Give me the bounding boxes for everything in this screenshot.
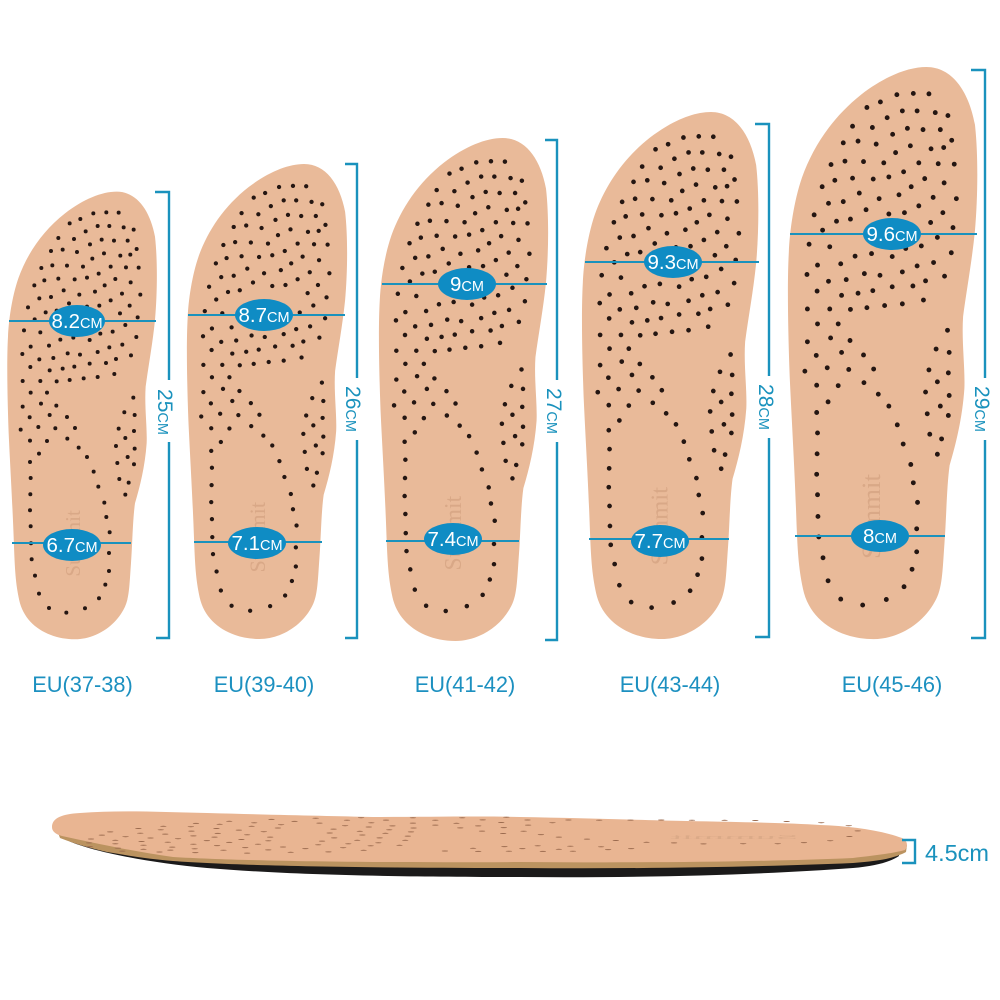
heel width line: [12, 542, 131, 544]
black base layer: [60, 830, 899, 877]
size label 37-38: EU(37-38): [32, 672, 133, 697]
insole: EU 37-38: [7, 192, 176, 639]
side view insole: [52, 811, 989, 877]
length bracket: [971, 70, 985, 638]
insole body: Summit: [441, 495, 467, 571]
ball width badge 8.7cm: [235, 299, 293, 331]
heel width line: [194, 541, 322, 543]
heel width badge 7.1cm: 7.1CM: [231, 532, 283, 555]
ball width badge 8.2cm: 8.2CM: [51, 310, 103, 333]
ball width badge 9cm: 9CM: [450, 273, 484, 296]
insole body: [187, 164, 347, 639]
ball width line: [585, 261, 759, 263]
ball width line: [790, 233, 977, 235]
ball width badge 8.7cm: 8.7CM: [238, 304, 290, 327]
size label 45-46: EU(45-46): [842, 672, 942, 697]
size label 41-42: EU(41-42): [415, 672, 515, 697]
heel width badge 8cm: [851, 520, 909, 552]
thickness label 4.5cm: 4.5cm: [925, 840, 989, 866]
insole body: [788, 67, 977, 639]
heel width badge 7.1cm: [228, 527, 286, 559]
length label 25cm: 25 CM: [153, 389, 176, 435]
length bracket: [345, 164, 357, 638]
insole body: Summit: [856, 473, 886, 559]
leather top surface: [52, 811, 907, 862]
size labels: [32, 672, 942, 697]
cork layer: [55, 825, 907, 868]
ball width line: [9, 320, 156, 322]
insole: EU 39-40: [187, 164, 364, 639]
heel width line: [386, 540, 519, 542]
heel width badge 7.7cm: 7.7CM: [634, 530, 686, 553]
length bracket: [545, 140, 557, 640]
ball width badge 9.6cm: 9.6CM: [866, 223, 918, 246]
heel width line: [795, 535, 945, 537]
insole body: Summit: [61, 510, 85, 577]
insole: EU 43-44: [582, 112, 777, 639]
heel width badge 6.7cm: 6.7CM: [46, 534, 98, 557]
length label 26cm: 26 CM: [341, 386, 364, 432]
size label 43-44: EU(43-44): [620, 672, 720, 697]
insole body: [582, 112, 758, 639]
ball width badge 9.6cm: [863, 218, 921, 250]
ball width line: [382, 283, 547, 285]
insole body: Summit: [647, 487, 674, 565]
perforations: [89, 817, 858, 853]
insole body: Summit: [245, 501, 270, 573]
ball width badge 8.2cm: [49, 305, 105, 337]
length label 27cm: 27 CM: [542, 388, 565, 434]
length bracket: [755, 124, 769, 637]
side view logo: Summit: [671, 834, 798, 841]
heel width line: [589, 538, 729, 540]
insole body: [379, 138, 548, 641]
length label 28cm: 28 CM: [754, 384, 777, 430]
insole: EU 41-42: [379, 138, 565, 641]
length bracket: [155, 192, 169, 638]
insole body: [7, 192, 157, 639]
heel width badge 6.7cm: [43, 529, 101, 561]
ball width line: [188, 314, 345, 316]
heel width badge 7.4cm: [424, 523, 482, 555]
thickness bracket: [902, 840, 915, 863]
ball width badge 9.3cm: 9.3CM: [647, 251, 699, 274]
ball width badge 9cm: [438, 268, 496, 300]
length label 29cm: 29 CM: [970, 386, 993, 432]
heel width badge 7.4cm: 7.4CM: [427, 528, 479, 551]
size label 39-40: EU(39-40): [214, 672, 314, 697]
heel width badge 7.7cm: [631, 525, 689, 557]
insole: EU 45-46: [788, 67, 993, 639]
heel width badge 8cm: 8CM: [863, 525, 897, 548]
ball width badge 9.3cm: [644, 246, 702, 278]
